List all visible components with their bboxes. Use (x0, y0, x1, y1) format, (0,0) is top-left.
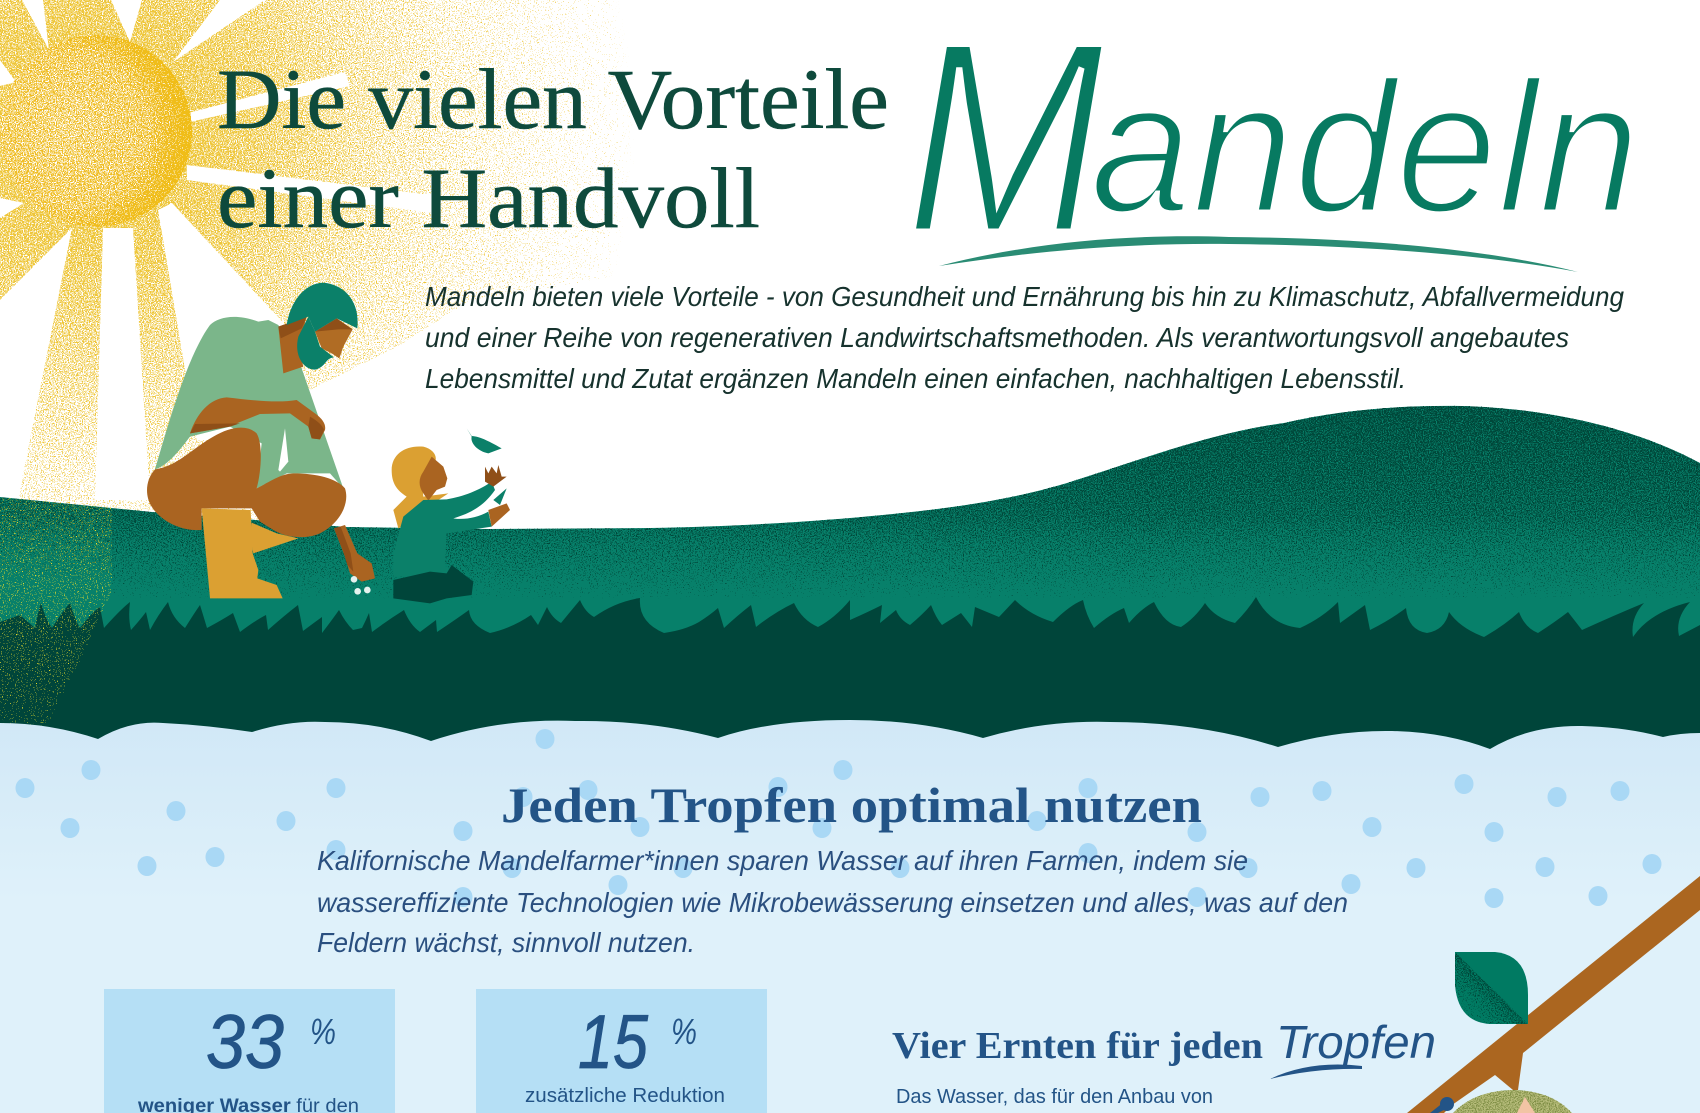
title (217, 51, 889, 246)
intro text: und einer Reihe von regenerativen Landwirtschaftsmethoden. Als verantwortungsvoll angebautes (425, 322, 1569, 353)
section text (317, 845, 1348, 958)
dark grass (0, 597, 1700, 770)
title: einer Handvoll (217, 150, 760, 246)
front boot (202, 508, 283, 598)
neck shadow (278, 317, 307, 338)
stat card: 15 percent: % (671, 1011, 697, 1052)
intro text: Mandeln bieten viele Vorteile - von Gesundheit und Ernährung bis hin zu Klimaschutz, Abfallvermeidung (425, 281, 1624, 312)
hill (0, 406, 1700, 680)
falling leaf (467, 428, 502, 453)
child hair (392, 446, 448, 528)
intro text: Lebensmittel und Zutat ergänzen Mandeln einen einfachen, nachhaltigen Lebensstil. (425, 363, 1406, 394)
lower arm shadow (334, 527, 353, 572)
illustration: sun and rays (0, 0, 720, 530)
almond hull (1453, 1090, 1572, 1113)
section text: wassereffiziente Technologien wie Mikrobewässerung einsetzen und alles, was auf den (317, 887, 1348, 918)
child lower hand (488, 503, 510, 527)
intro text (425, 281, 1624, 394)
shirt (155, 317, 343, 488)
stat card: 33 percent: % (310, 1011, 336, 1052)
stat card: 33 percent (104, 989, 395, 1113)
stat card: 15 percent (476, 989, 767, 1113)
almond 2 (354, 588, 361, 595)
almond 3 (364, 587, 371, 593)
child face (420, 457, 447, 501)
brush underline (939, 236, 1578, 272)
sub heading (892, 1016, 1436, 1079)
title: Die vielen Vorteile (217, 51, 889, 147)
almond 1 (351, 576, 357, 583)
water background (0, 720, 1700, 1113)
section text: Kalifornische Mandelfarmer*innen sparen Wasser auf ihren Farmen, indem sie (317, 845, 1248, 876)
arm (190, 397, 325, 439)
yellow light on hill at left (0, 497, 112, 755)
section text: Feldern wächst, sinnvoll nutzen. (317, 927, 695, 958)
illustration: child (392, 428, 510, 603)
title script word: Mandeln: andeln (1090, 42, 1640, 252)
small leaf in hand (493, 488, 507, 505)
stat card: 15 percent: zusätzliche Reduktion (525, 1085, 725, 1107)
sub text: Das Wasser, das für den Anbau von (896, 1086, 1213, 1108)
gap in shirt (278, 428, 288, 472)
stat card: 33 percent: 33 (206, 1000, 284, 1085)
back boot (250, 523, 298, 553)
water droplets (16, 729, 1662, 908)
illustration: crouching man (147, 283, 375, 598)
section heading: Jeden Tropfen optimal nutzen (501, 777, 1202, 833)
title script word: Mandeln (905, 0, 1640, 291)
sub heading: Vier Ernten für jeden (892, 1025, 1263, 1067)
child legs (393, 565, 473, 603)
lower arm and hand (334, 525, 375, 582)
child upper hand (485, 465, 507, 487)
sub heading: Tropfen (1276, 1016, 1436, 1068)
brow shadow (315, 318, 353, 332)
arm shadow (190, 417, 324, 439)
hair (287, 283, 358, 332)
blue dot on branch (1430, 1097, 1454, 1113)
leaf (1455, 952, 1528, 1024)
neck (278, 317, 307, 373)
child body (393, 482, 495, 577)
legs (147, 428, 346, 537)
stat card: 15 percent: 15 (578, 1000, 649, 1085)
beard (297, 317, 334, 370)
almond branch (1407, 876, 1700, 1113)
face (315, 318, 353, 358)
